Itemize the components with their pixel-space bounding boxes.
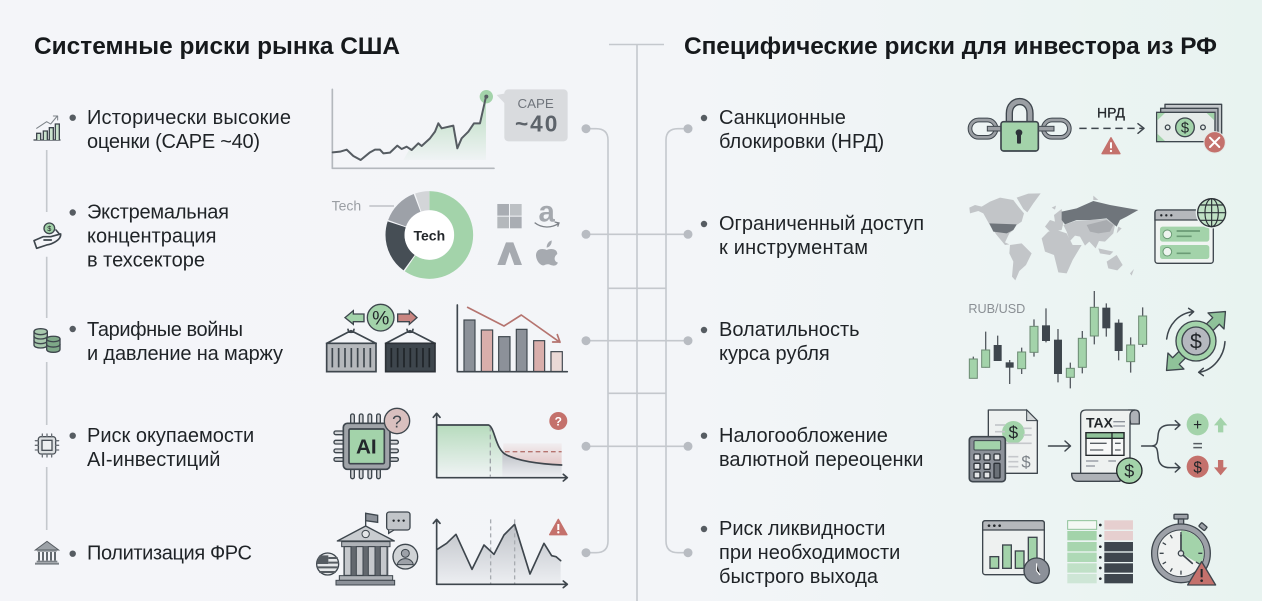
icon: locked chain bbox=[970, 102, 1069, 151]
chart: falling margin bars bbox=[457, 305, 567, 372]
chart: tech donut: Tech bbox=[414, 227, 445, 243]
chart: AI return decline: ? bbox=[555, 414, 562, 428]
chart: CAPE history line bbox=[332, 89, 568, 168]
chart: tech donut bbox=[332, 198, 464, 269]
left icon rail lines bbox=[46, 150, 48, 530]
icon: chip bbox=[35, 434, 59, 457]
icon: liquidity chart window bbox=[983, 521, 1049, 583]
arrow: to tax form bbox=[1048, 441, 1070, 451]
item: sanctions: Санкционные bbox=[719, 107, 846, 129]
item: limited access: к инструментам bbox=[719, 237, 868, 259]
item: AI payback bbox=[70, 425, 254, 471]
icon: hand with coin: $ bbox=[47, 224, 51, 233]
item: tech concentration bbox=[70, 202, 229, 272]
item: currency revaluation tax bbox=[701, 425, 923, 471]
item: tariff wars: и давление на маржу bbox=[87, 343, 283, 365]
central connector lines bbox=[582, 44, 692, 601]
item: liquidity risk: Риск ликвидности bbox=[719, 518, 885, 540]
item: currency revaluation tax: Налогообложение bbox=[719, 425, 888, 447]
icon: dollar exchange arrows bbox=[1159, 304, 1233, 378]
item: sanctions: блокировки (НРД) bbox=[719, 131, 884, 153]
icon: Federal Reserve building bbox=[317, 512, 418, 585]
icons: tech company logos: a bbox=[538, 195, 555, 228]
icon: calculator and statement bbox=[969, 410, 1037, 482]
icon: blocked cash bbox=[1157, 104, 1225, 153]
item: high valuations: оценки (CAPE ~40) bbox=[87, 131, 260, 153]
chart: Fed volatility bbox=[433, 519, 567, 588]
icon: dollar exchange arrows: $ bbox=[1190, 330, 1202, 354]
icon: tax document bbox=[1072, 410, 1142, 483]
item: ruble volatility: Волатильность bbox=[719, 319, 860, 341]
item: tech concentration: концентрация bbox=[87, 226, 216, 248]
item: ruble volatility bbox=[701, 319, 860, 365]
panel: left risk list bbox=[70, 107, 291, 564]
item: high valuations: Исторически высокие bbox=[87, 107, 291, 129]
item: liquidity risk bbox=[701, 518, 900, 588]
callout: CAPE ~40: CAPE bbox=[517, 96, 554, 111]
item: Fed politicisation: Политизация ФРС bbox=[87, 542, 252, 564]
item: sanctions bbox=[701, 107, 884, 153]
arrow: NRD transfer blocked: НРД bbox=[1097, 104, 1125, 120]
callout: CAPE ~40: ~40 bbox=[515, 111, 557, 137]
item: limited access: Ограниченный доступ bbox=[719, 213, 924, 235]
item: ruble volatility: курса рубля bbox=[719, 343, 830, 365]
icon: tax document: TAX bbox=[1086, 414, 1114, 430]
item: high valuations bbox=[70, 107, 291, 153]
chart: tech donut: Tech bbox=[332, 198, 361, 214]
icon: tax document: $ bbox=[1124, 461, 1134, 481]
icon: calculator and statement: $ bbox=[1021, 452, 1031, 471]
icon: bank bbox=[35, 541, 59, 565]
map: world bbox=[969, 193, 1138, 280]
title: US market systemic risks: Системные риски рынка США bbox=[34, 33, 400, 60]
icon: gain or loss branch: $ bbox=[1193, 459, 1202, 476]
icons: tech company logos bbox=[497, 195, 559, 266]
icon: gain or loss branch bbox=[1142, 413, 1227, 478]
icon: shipping containers with percent bbox=[327, 304, 435, 372]
item: AI payback: Риск окупаемости bbox=[87, 425, 254, 447]
icon: gain or loss branch: + bbox=[1193, 417, 1202, 434]
icon: AI chip with question: AI bbox=[356, 435, 377, 458]
item: AI payback: AI-инвестиций bbox=[87, 449, 220, 471]
arrow: NRD transfer blocked bbox=[1079, 104, 1144, 154]
icon: AI chip with question bbox=[334, 408, 410, 479]
icon: broker window with globe bbox=[1155, 197, 1228, 263]
icon: hand with coin bbox=[34, 223, 61, 248]
title: risks for Russian investor: Специфические риски для инвестора из РФ bbox=[684, 33, 1217, 60]
icon: coin stacks bbox=[34, 329, 60, 352]
item: tech concentration: Экстремальная bbox=[87, 202, 229, 224]
icon: shipping containers with percent: % bbox=[372, 308, 389, 329]
icon: AI chip with question: ? bbox=[392, 411, 402, 431]
icon: stopwatch with warning bbox=[1152, 514, 1216, 585]
item: currency revaluation tax: валютной переоценки bbox=[719, 449, 923, 471]
chart: RUB/USD candlesticks bbox=[968, 291, 1147, 388]
item: tariff wars: Тарифные войны bbox=[87, 319, 243, 341]
item: tariff wars bbox=[70, 319, 283, 365]
item: liquidity risk: быстрого выхода bbox=[719, 566, 879, 588]
chart: order book table bbox=[1067, 520, 1133, 583]
icon: calculator and statement: $ bbox=[1009, 422, 1019, 442]
icon: rising chart bbox=[34, 116, 60, 140]
panel: right risk list bbox=[701, 107, 924, 588]
chart: AI return decline bbox=[433, 412, 567, 481]
item: limited access bbox=[701, 213, 924, 259]
icon: blocked cash: $ bbox=[1181, 121, 1189, 137]
item: liquidity risk: при необходимости bbox=[719, 542, 900, 564]
callout: CAPE ~40 bbox=[497, 89, 568, 141]
chart: RUB/USD candlesticks: RUB/USD bbox=[968, 302, 1025, 316]
item: tech concentration: в техсекторе bbox=[87, 250, 205, 272]
